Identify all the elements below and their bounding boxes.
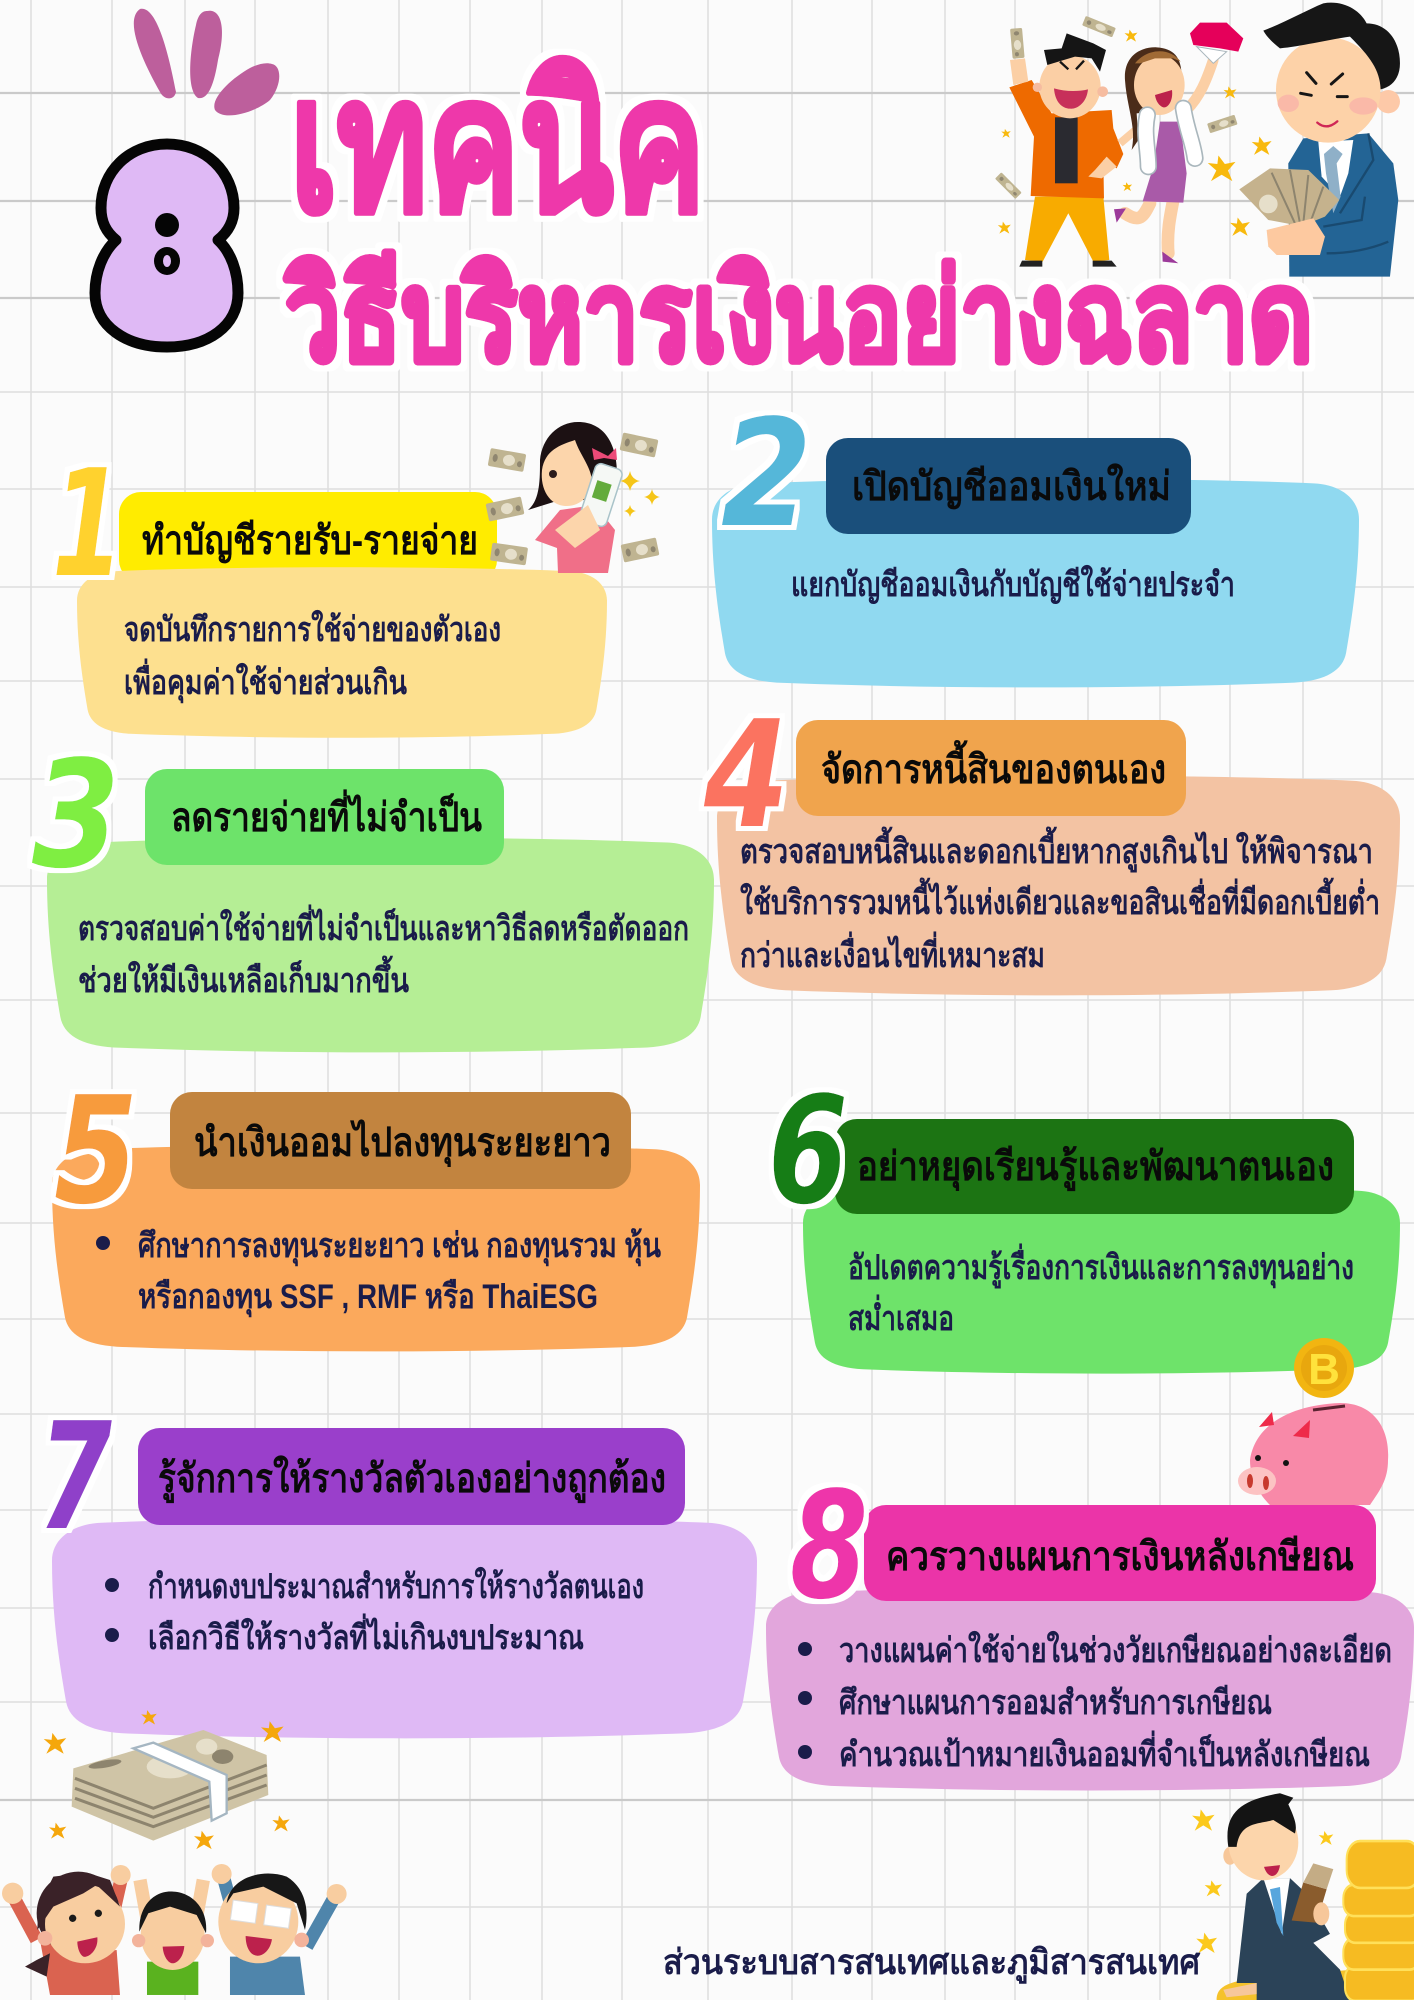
text: step 4 <box>740 826 1380 975</box>
text: step 7 <box>105 1566 644 1657</box>
header: step 1: ทำบัญชีรายรับ-รายจ่าย <box>142 519 478 564</box>
number 2: 2 <box>721 388 812 560</box>
illustration: banknote stack with sparkles <box>44 1710 290 1849</box>
header: step 1 <box>119 492 497 582</box>
man in orange jacket <box>1009 33 1123 267</box>
illustration: piggy bank and bitcoin <box>1238 1338 1388 1505</box>
header: step 5 <box>170 1092 631 1189</box>
header: step 2 <box>826 438 1191 534</box>
text: step 2: แยกบัญชีออมเงินกับบัญชีใช้จ่ายประจำ <box>791 564 1235 605</box>
big number 8 in title <box>95 144 238 347</box>
text: step 3: ช่วยให้มีเงินเหลือเก็บมากขึ้น <box>78 955 409 1000</box>
number 8: 8 <box>790 1460 868 1632</box>
panel: step 4 <box>703 689 1400 995</box>
text: step 1: เพื่อคุมค่าใช้จ่ายส่วนเกิน <box>124 658 407 704</box>
header: step 3 <box>145 769 504 865</box>
title <box>283 43 1313 387</box>
text: step 8 <box>798 1630 1392 1774</box>
text: step 5: ศึกษาการลงทุนระยะยาว เช่น กองทุนรวม หุ้น <box>138 1227 661 1267</box>
body card: step 1 <box>77 567 607 738</box>
panel: step 5 <box>52 1065 700 1351</box>
number 6: 6 <box>768 1065 848 1237</box>
title line 1: เทคนิค <box>290 43 705 250</box>
panel: step 6 <box>768 1065 1400 1374</box>
header: step 4 <box>796 720 1186 816</box>
text: step 5: หรือกองทุน SSF , RMF หรือ ThaiESG <box>138 1278 598 1318</box>
header: step 6: อย่าหยุดเรียนรู้และพัฒนาตนเอง <box>857 1145 1334 1192</box>
body card: step 5 <box>52 1145 700 1351</box>
header: step 8 <box>864 1505 1376 1601</box>
sparkles and flying banknotes <box>995 16 1272 236</box>
text: step 7: เลือกวิธีให้รางวัลที่ไม่เกินงบประมาณ <box>148 1613 584 1657</box>
panel: step 3 <box>32 729 714 1052</box>
header: step 4: จัดการหนี้สินของตนเอง <box>821 740 1166 792</box>
body card: step 4 <box>717 776 1400 995</box>
illustration: piggy bank and bitcoin: B <box>1308 1345 1340 1394</box>
body card: step 8 <box>766 1588 1414 1790</box>
header: step 2: เปิดบัญชีออมเงินใหม่ <box>852 463 1171 510</box>
businessman holding cash fan <box>1239 3 1400 277</box>
number 4: 4 <box>703 689 789 861</box>
icon: accent strokes above the big 8 <box>134 9 279 115</box>
illustration: businessman on gold coins <box>1192 1793 1414 2000</box>
text: step 7: กำหนดงบประมาณสำหรับการให้รางวัลตนเอง <box>148 1566 644 1606</box>
header: step 8: ควรวางแผนการเงินหลังเกษียณ <box>886 1535 1354 1579</box>
panel: step 2 <box>712 388 1359 687</box>
panel: step 8 <box>766 1460 1414 1790</box>
text: step 1: จดบันทึกรายการใช้จ่ายของตัวเอง <box>124 609 501 649</box>
header: step 7 <box>138 1428 685 1525</box>
body card: step 3 <box>47 838 714 1052</box>
text: step 6 <box>848 1243 1354 1338</box>
text: step 1 <box>124 609 501 704</box>
number 5: 5 <box>54 1065 138 1237</box>
text: step 4: กว่าและเงื่อนไขที่เหมาะสม <box>740 931 1045 975</box>
text: step 6: สม่ำเสมอ <box>848 1294 954 1338</box>
illustration: happy family <box>2 1864 347 1995</box>
body card: step 7 <box>52 1518 757 1738</box>
panel: step 1 <box>52 438 607 738</box>
body card: step 6 <box>803 1186 1400 1374</box>
header: step 7: รู้จักการให้รางวัลตัวเองอย่างถูกต้อง <box>158 1455 666 1503</box>
illustration: girl on phone with banknotes <box>486 422 660 573</box>
header: step 5: นำเงินออมไปลงทุนระยะยาว <box>194 1119 611 1168</box>
header: step 6 <box>835 1119 1354 1214</box>
panel: step 7 <box>38 1391 757 1738</box>
illustration: rich couple and businessman with cash <box>995 3 1400 277</box>
text: step 5 <box>96 1227 661 1318</box>
body card: step 2 <box>712 479 1359 687</box>
text: step 3 <box>78 904 689 1000</box>
text: step 3: ตรวจสอบค่าใช้จ่ายที่ไม่จำเป็นและหาวิธีลดหรือตัดออก <box>78 904 689 948</box>
woman in purple dress <box>1114 23 1243 263</box>
number 3: 3 <box>32 729 120 901</box>
number 7: 7 <box>38 1391 112 1563</box>
header: step 3: ลดรายจ่ายที่ไม่จำเป็น <box>171 789 482 840</box>
footer credit: ส่วนระบบสารสนเทศและภูมิสารสนเทศ <box>663 1943 1201 1984</box>
text: step 8: ศึกษาแผนการออมสำหรับการเกษียณ <box>839 1684 1272 1722</box>
number 1: 1 <box>52 438 124 610</box>
